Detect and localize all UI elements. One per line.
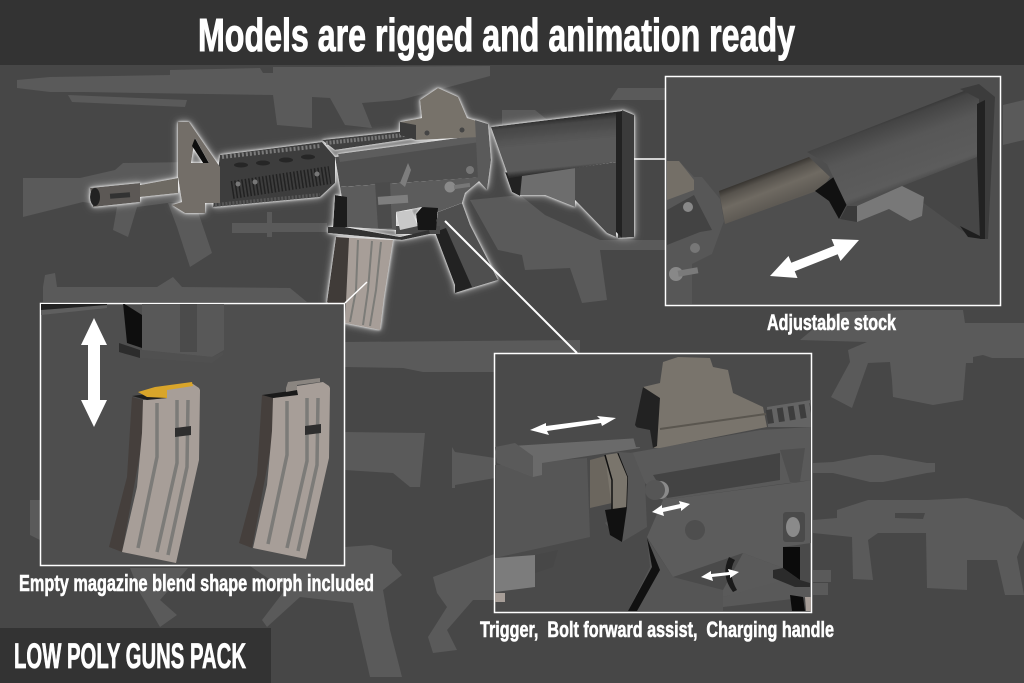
arrow: magazine up down — [81, 318, 107, 427]
buttstock cheek block — [520, 168, 575, 207]
pistol grip — [435, 203, 498, 293]
forward assist knob — [660, 481, 669, 499]
receiver — [667, 161, 724, 304]
top rail — [322, 130, 415, 150]
stock body — [807, 89, 979, 206]
magazine well view — [142, 303, 224, 357]
magazine well — [333, 195, 347, 227]
trigger guard — [396, 210, 418, 230]
buttplate — [960, 84, 995, 239]
end plate — [605, 452, 647, 542]
rear sight carry handle — [400, 88, 480, 140]
arrow: trigger — [701, 569, 739, 581]
caption: trigger: Trigger, Bolt forward assist, Charging handle — [480, 617, 834, 642]
caption: adjustable stock: Adjustable stock — [767, 310, 897, 335]
stock dark slot — [815, 176, 847, 219]
top title bar — [0, 0, 1024, 65]
magazine — [327, 237, 393, 330]
panel: trigger, bolt assist, charging handle — [494, 354, 812, 612]
buffer tube — [590, 456, 612, 508]
grip — [628, 538, 723, 611]
trigger — [725, 557, 737, 592]
front sight — [172, 122, 220, 213]
upper receiver — [335, 137, 487, 187]
trigger guard — [723, 580, 810, 607]
bullet — [138, 382, 193, 398]
barrel — [140, 178, 178, 197]
buttplate — [616, 110, 634, 238]
cheek block — [857, 186, 924, 222]
arrow: charging handle — [530, 416, 616, 435]
bottom label bar — [0, 628, 271, 683]
pack label: LOW POLY GUNS PACK — [14, 637, 246, 676]
stock ring — [475, 120, 491, 190]
caption: magazine: Empty magazine blend shape morph included — [19, 570, 374, 596]
buttstock body — [491, 111, 622, 178]
callout line: trigger — [445, 221, 577, 353]
arrow: stock slide — [770, 239, 859, 278]
panel: adjustable stock — [666, 76, 1000, 306]
buttstock lower — [509, 162, 616, 237]
handguard — [213, 142, 335, 207]
empty magazine — [239, 378, 330, 559]
stock tube — [719, 157, 830, 224]
stock top lip — [495, 438, 640, 477]
callout line: stock — [612, 158, 666, 160]
callout line: magazine — [345, 282, 367, 303]
charging handle latch — [634, 428, 653, 448]
lower receiver — [647, 480, 811, 577]
main rifle model — [90, 88, 634, 330]
ejection tube — [653, 453, 780, 498]
panel: magazine morph — [40, 303, 344, 566]
full magazine — [109, 382, 200, 563]
rail — [767, 400, 811, 427]
stock lower — [904, 160, 970, 230]
ring — [605, 453, 628, 510]
receiver upper — [630, 427, 811, 500]
rear sight — [637, 357, 767, 448]
arrow: bolt assist — [652, 501, 690, 516]
lower receiver — [340, 177, 484, 230]
flash hider — [90, 183, 140, 207]
stock — [495, 458, 590, 558]
